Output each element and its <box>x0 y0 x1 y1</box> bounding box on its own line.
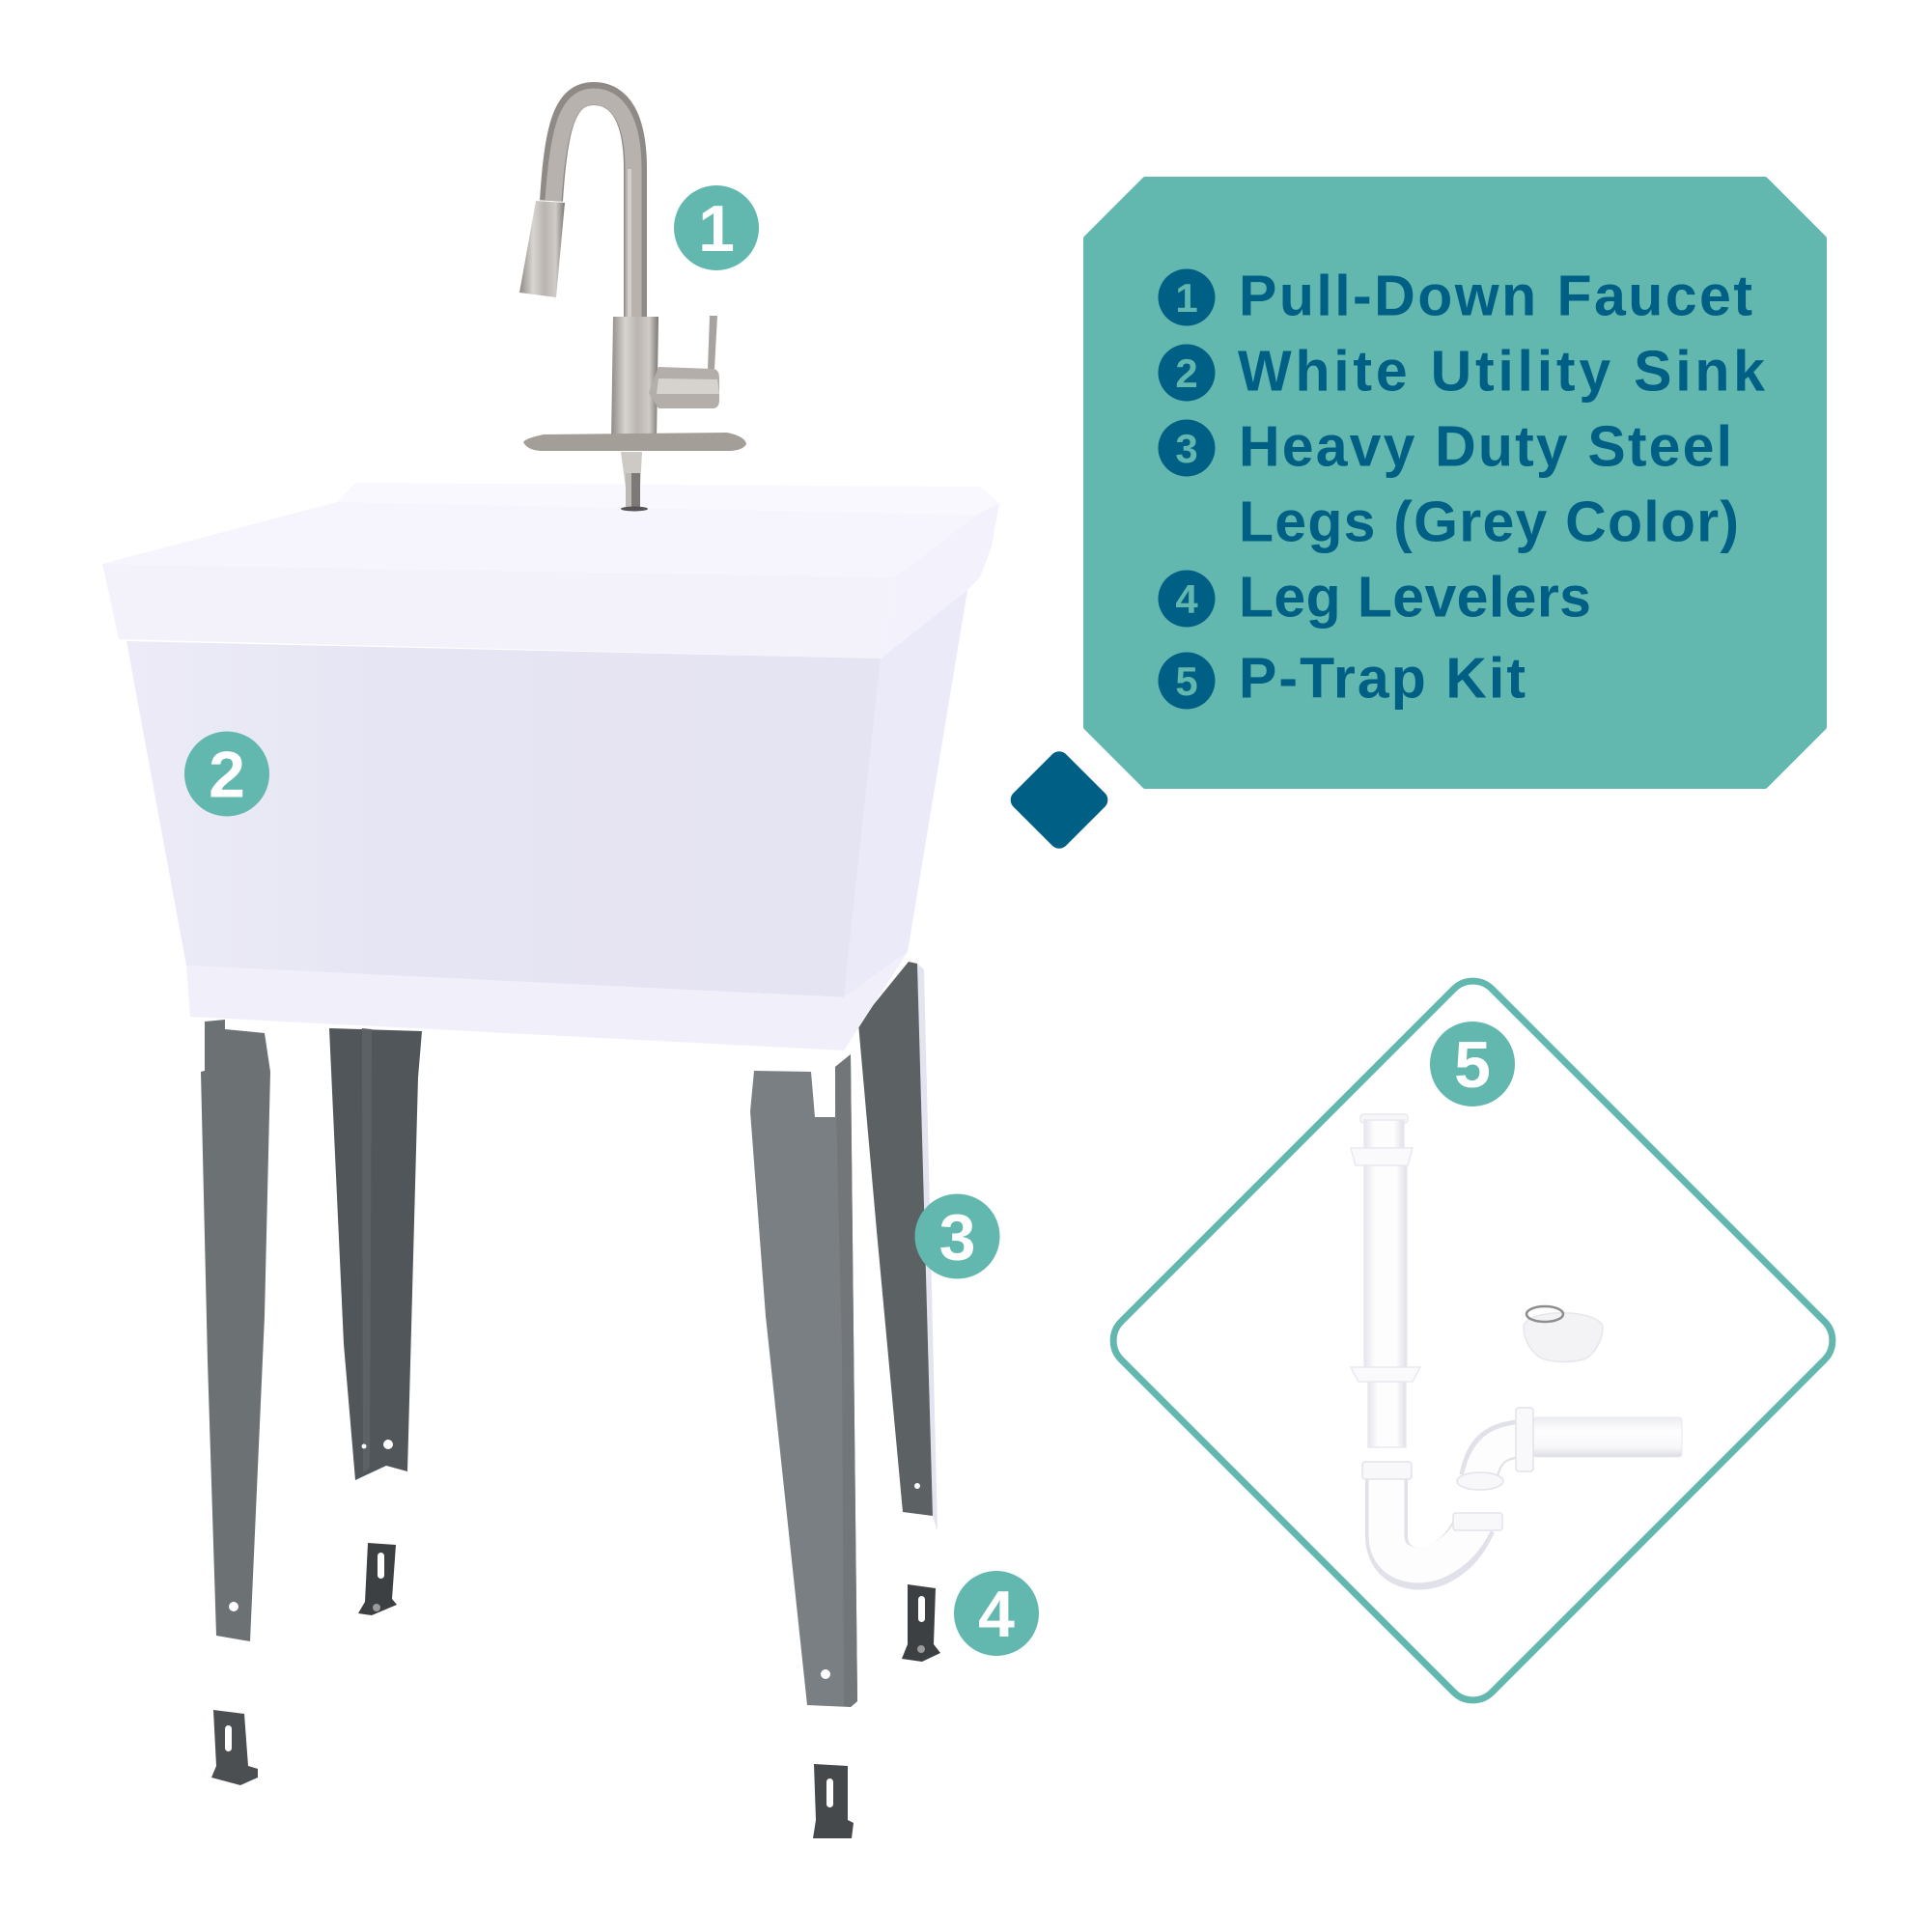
leveler front right <box>813 1764 854 1838</box>
white utility sink <box>102 483 999 1050</box>
legend item 1: 1 <box>1175 275 1198 321</box>
badge 4: 4 <box>978 1578 1015 1651</box>
faucet stem <box>621 452 648 512</box>
legend item 5: P-Trap Kit <box>1239 647 1526 711</box>
sink body front <box>126 641 881 997</box>
j-bend pipe <box>1362 1462 1502 1569</box>
faucet body <box>611 317 658 441</box>
leg levelers <box>211 1543 940 1838</box>
legend item 4: 4 <box>1175 576 1198 622</box>
back right leg <box>858 962 938 1531</box>
badge 2: 2 <box>209 738 245 811</box>
legend item 3: 3 <box>1175 426 1198 471</box>
accent diamond <box>1007 747 1111 853</box>
legend item 3: Heavy Duty Steel <box>1239 415 1732 479</box>
elbow pipe <box>1457 1408 1682 1490</box>
sink top deck <box>337 483 999 515</box>
sink base band <box>186 952 908 1050</box>
leveler back right <box>902 1584 940 1662</box>
faucet handle <box>649 316 719 408</box>
legend item 4: Leg Levelers <box>1239 566 1591 630</box>
legend item 2: 2 <box>1175 350 1198 396</box>
legend item 3 <box>1159 415 1739 554</box>
legs <box>201 962 938 1707</box>
legend item 5: 5 <box>1175 658 1198 704</box>
leveler back left <box>358 1543 397 1615</box>
legend item 3: Legs (Grey Color) <box>1239 490 1739 554</box>
p-trap kit parts <box>1351 1114 1682 1569</box>
badge 2 <box>184 732 269 817</box>
tailpiece pipe <box>1351 1114 1420 1447</box>
legend item 2: White Utility Sink <box>1238 340 1765 404</box>
sink right rim <box>881 503 999 658</box>
rubber stopper <box>1524 1306 1603 1361</box>
badge 5: 5 <box>1454 1028 1491 1102</box>
back left leg <box>329 1028 422 1480</box>
badge 1: 1 <box>698 192 735 266</box>
front right leg <box>750 1054 857 1707</box>
badge 4 <box>954 1571 1039 1656</box>
faucet deck plate <box>523 433 746 451</box>
legend panel <box>1086 180 1824 786</box>
badge 3: 3 <box>939 1201 975 1274</box>
p-trap kit diamond frame <box>1103 970 1843 1711</box>
faucet spray head <box>519 201 565 297</box>
sink body right side <box>844 590 967 997</box>
faucet neck <box>551 94 635 321</box>
sink basin interior <box>102 502 977 577</box>
front left leg <box>201 1020 270 1641</box>
legend item 1: Pull-Down Faucet <box>1239 265 1752 328</box>
badge 3 <box>915 1193 1000 1278</box>
sink front rim <box>102 564 895 658</box>
pull-down faucet <box>519 94 746 512</box>
badge 5 <box>1430 1022 1515 1106</box>
badge 1 <box>674 185 759 270</box>
panel background <box>1086 180 1824 786</box>
leveler front left <box>211 1710 258 1785</box>
